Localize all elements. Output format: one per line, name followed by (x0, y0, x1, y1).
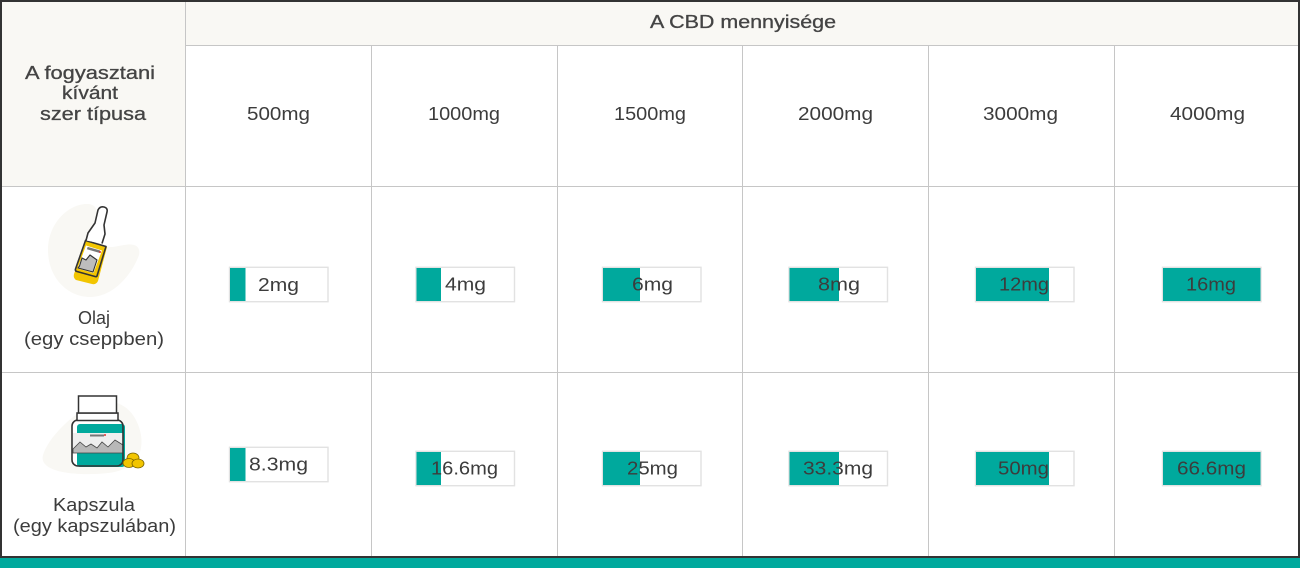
header background: CBD amount (185, 2, 1298, 45)
bar: oil 500mg (230, 267, 328, 302)
bar: oil 3000mg (976, 267, 1074, 302)
bar: capsule 1000mg: 16.6mg (431, 458, 498, 478)
bar: oil 2000mg: 8mg (818, 274, 860, 294)
bar: capsule 4000mg (1162, 451, 1261, 486)
column headings: amounts: 3000mg (983, 104, 1058, 124)
heading: product type: kívánt (62, 83, 118, 103)
icon: oil dropper bottle (48, 204, 139, 297)
bar: capsule 2000mg (789, 451, 888, 486)
bar: oil 4000mg: 16mg (1186, 274, 1236, 294)
label: capsule (13, 495, 176, 536)
bar: capsule 1500mg: 25mg (627, 458, 678, 478)
bar: capsule 1500mg (602, 451, 701, 486)
capsule row: bars (230, 447, 1261, 486)
column headings: amounts: 4000mg (1170, 104, 1245, 124)
heading: product type: A fogyasztani (25, 63, 155, 83)
bar: capsule 3000mg: 50mg (998, 458, 1049, 478)
bar: oil 2000mg (789, 267, 888, 302)
label: oil: Olaj (78, 308, 110, 328)
bar: capsule 500mg (230, 447, 328, 482)
bar: capsule 2000mg: 33.3mg (803, 458, 873, 478)
heading: product type: szer típusa (40, 104, 147, 124)
column headings: amounts: 500mg (247, 104, 310, 124)
bar: oil 1500mg (602, 267, 701, 302)
heading: product type (25, 63, 155, 124)
bar: capsule 1000mg (416, 451, 514, 486)
icon: capsule jar (43, 396, 144, 474)
label: capsule: Kapszula (53, 495, 136, 515)
bar: oil 4000mg (1162, 267, 1261, 302)
column headings: amounts: 1500mg (614, 104, 686, 124)
bottom teal band (0, 558, 1300, 568)
bar: capsule 4000mg: 66.6mg (1177, 458, 1246, 478)
oil row: bars (230, 267, 1261, 302)
bar: capsule 500mg: 8.3mg (249, 454, 308, 474)
label: oil (24, 308, 164, 349)
heading: CBD amount: A CBD mennyisége (650, 12, 836, 32)
bar: oil 500mg: 2mg (258, 274, 299, 295)
column headings: amounts: 1000mg (428, 104, 500, 124)
bar: oil 1000mg (416, 267, 514, 302)
bar: oil 1000mg: 4mg (445, 274, 486, 294)
label: oil: (egy cseppben) (24, 329, 164, 349)
bar: oil 1500mg: 6mg (632, 274, 673, 294)
bar: capsule 3000mg (976, 451, 1074, 486)
column headings: amounts: 2000mg (798, 104, 873, 124)
bar: oil 3000mg: 12mg (999, 274, 1049, 294)
header background: product type (2, 2, 185, 186)
label: capsule: (egy kapszulában) (13, 516, 176, 536)
column headings: amounts (247, 104, 1245, 124)
